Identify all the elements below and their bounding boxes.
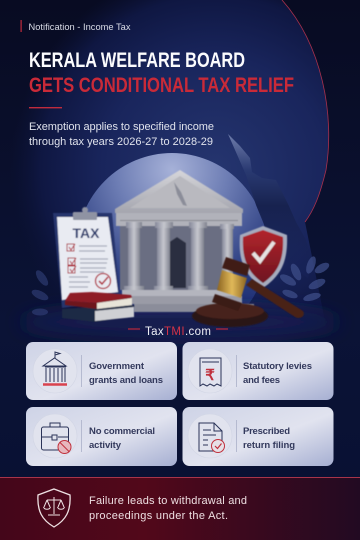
icon: receipt xyxy=(200,358,221,386)
floor shade xyxy=(20,306,340,338)
laurel left xyxy=(30,268,50,316)
laurel right xyxy=(278,255,331,303)
card: grants: Government xyxy=(89,361,145,372)
subtitle: through tax years 2026-27 to 2028-29 xyxy=(29,136,213,148)
card: filing: Prescribed xyxy=(243,426,290,437)
head bottom xyxy=(212,294,242,311)
kicker: Notification - Income Tax xyxy=(28,22,131,32)
card: grants: grants and loans xyxy=(89,375,163,386)
silhouette: Kerala map xyxy=(228,134,312,278)
handle xyxy=(246,279,304,318)
lines xyxy=(69,246,108,287)
icon: briefcase xyxy=(42,423,68,450)
checklist xyxy=(67,244,76,273)
warning text: proceedings under the Act. xyxy=(89,510,228,522)
card: levies: ₹ xyxy=(205,367,215,384)
warning text: Failure leads to withdrawal and xyxy=(89,495,247,507)
subtitle xyxy=(29,121,214,148)
card: commercial: No commercial xyxy=(89,426,155,437)
icon: government building xyxy=(43,352,67,384)
card: commercial: activity xyxy=(89,440,122,451)
columns xyxy=(124,222,234,290)
tax label: TAX xyxy=(72,225,100,241)
clipboard xyxy=(53,207,120,308)
card: filing xyxy=(182,407,334,466)
check xyxy=(253,242,274,261)
books xyxy=(62,292,134,322)
card: filing: return filing xyxy=(243,440,295,451)
pediment xyxy=(115,170,243,213)
gavel xyxy=(192,257,304,327)
subtitle: Exemption applies to specified income xyxy=(29,121,214,133)
card: commercial xyxy=(26,407,177,466)
brand: TaxTMI.com xyxy=(145,326,211,338)
entablature xyxy=(116,213,242,226)
orb red arc xyxy=(282,0,329,222)
title rule xyxy=(29,107,62,108)
card: levies xyxy=(182,342,334,400)
steps xyxy=(122,290,240,296)
dome glow behind building xyxy=(86,153,264,316)
footer band xyxy=(0,477,360,540)
card: levies: and fees xyxy=(243,375,280,386)
head top xyxy=(222,257,250,276)
card: grants xyxy=(26,342,177,400)
cella xyxy=(120,226,232,290)
paper xyxy=(57,217,118,300)
background orb xyxy=(25,0,328,342)
icon: shield with scales xyxy=(38,489,70,527)
shield xyxy=(240,226,287,288)
brand xyxy=(128,326,228,338)
icon: document xyxy=(199,423,222,451)
stamp xyxy=(96,274,110,288)
warning text xyxy=(89,495,247,522)
clip xyxy=(73,212,97,220)
pediment map xyxy=(174,182,187,206)
base xyxy=(192,305,268,327)
door xyxy=(168,237,186,288)
band xyxy=(217,270,247,298)
card: levies: Statutory levies xyxy=(243,361,312,372)
title xyxy=(29,49,294,97)
title: KERALA WELFARE BOARD xyxy=(29,49,245,72)
building xyxy=(115,170,254,312)
title: GETS CONDITIONAL TAX RELIEF xyxy=(29,74,294,97)
